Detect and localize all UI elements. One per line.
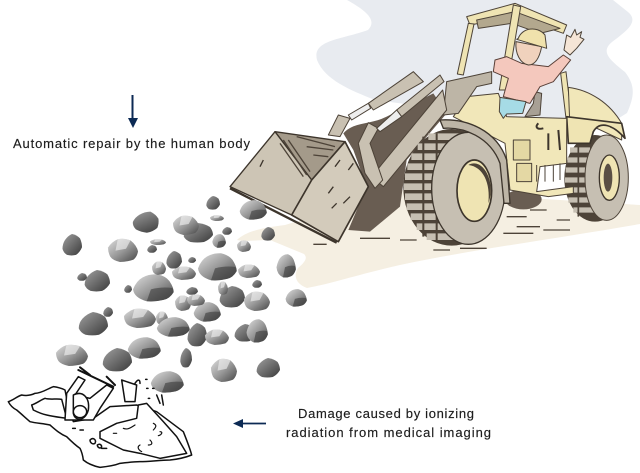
pile of rocks [56,196,307,393]
label: automatic repair: Automatic repair by the human body [13,136,250,151]
front wheel tread [403,129,500,246]
hole outline [8,387,192,467]
bucket side panel [230,132,312,215]
front tread blocks [404,137,467,237]
loader shadow [343,93,447,232]
cab body [453,93,573,197]
cab lower detail [513,140,560,182]
seat [525,92,542,117]
arrow: down to repair label [128,95,138,128]
flying debris [135,379,163,405]
rocks: top cluster [62,196,275,262]
cab roof frame [457,3,572,118]
bucket front face [292,142,368,242]
dirt pile [100,403,187,458]
label: radiation damage: Damage caused by ionizing [298,406,474,421]
operator head [516,42,542,65]
rocks: lower cluster [56,307,280,393]
wheel loader illustration [230,3,628,250]
front hub [468,163,491,203]
loader arm pivot plate [443,72,492,115]
rocks: middle cluster [77,251,307,322]
cab posts [457,5,572,118]
dirt marks [113,423,162,452]
hole inner edge [32,398,67,418]
operator trousers [499,97,526,118]
front rim [457,160,492,221]
operator hand waving [564,29,584,55]
pickaxe handle [78,367,115,387]
shadow under machine [505,189,542,209]
worker head [73,394,89,419]
arrow: left toward worker [233,419,266,428]
worker body [65,377,113,420]
operator shirt [493,55,571,103]
door handle marks [537,123,560,150]
rear fender [567,117,625,143]
loose pebbles [73,428,107,448]
worker beard [73,406,87,418]
background blob: pale blue sky [316,0,633,130]
rear wheel [564,135,628,222]
label: radiation damage: radiation from medical imaging [286,425,491,440]
ground: cream patch [237,190,640,288]
bucket lip [230,188,337,243]
cartoon worker digging in a hole [8,367,192,467]
bucket inside [275,132,345,180]
shovel blade [122,380,137,402]
front tread grooves [423,133,437,240]
label: radiation damage [286,406,491,440]
lift arm [372,90,447,187]
front wheel face [432,132,505,244]
operator helmet [517,29,547,48]
ground dashes [313,210,570,250]
bucket hatch [280,137,335,177]
bucket marks [260,160,353,208]
front fender [440,120,510,203]
rear body [568,87,622,140]
hydraulic cylinders [328,72,444,137]
bell crank [358,123,383,188]
